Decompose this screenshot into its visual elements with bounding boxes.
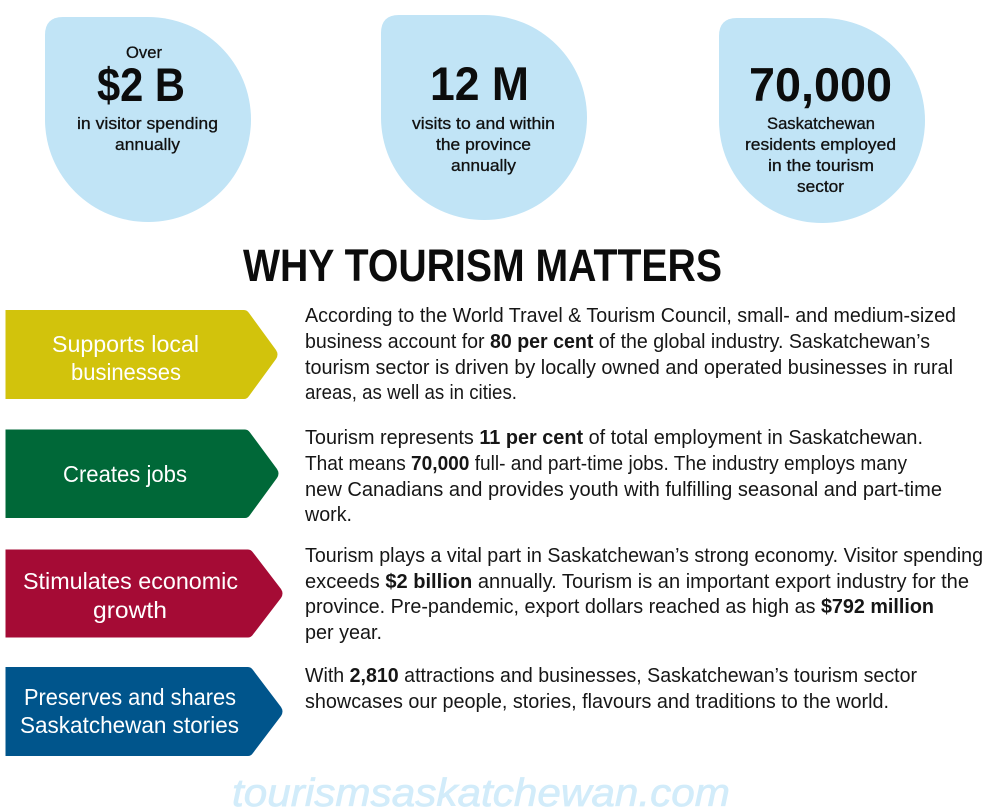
body text: [304, 426, 942, 526]
body text: [305, 304, 956, 404]
arrow label: stimulates economic growth: [6, 550, 282, 638]
body text: According to the World Travel & Tourism Council, small- and medium-sized: [305, 304, 956, 327]
body text: new Canadians and provides youth with fulfilling seasonal and part-time: [305, 478, 942, 501]
arrow label: creates jobs: Creates jobs: [63, 461, 187, 487]
stat number: $2 B: $2 B: [97, 58, 185, 111]
body text: tourism sector is driven by locally owned and operated businesses in rural: [305, 356, 953, 379]
stat number: 70,000: 70,000: [749, 58, 892, 111]
stat description: [745, 115, 896, 196]
body text: per year.: [305, 621, 382, 644]
stat description: in visitor spending: [77, 115, 218, 133]
arrow label: creates jobs: [6, 430, 278, 518]
teardrop badge: [45, 17, 251, 222]
stat label: over: Over: [126, 44, 162, 62]
panel: visitor spending stat: [45, 17, 251, 222]
arrow label: supports local businesses: Supports local: [52, 331, 199, 357]
stat description: in the tourism: [768, 157, 874, 175]
body text: With 2,810 attractions and businesses, Saskatchewan’s tourism sector: [305, 664, 917, 687]
body text: That means 70,000 full- and part-time jobs. The industry employs many: [305, 452, 908, 475]
panel: creates jobs: [6, 426, 942, 526]
body text: areas, as well as in cities.: [305, 381, 517, 404]
arrow label: supports local businesses: businesses: [71, 359, 181, 385]
stat description: the province: [436, 136, 531, 154]
arrow label: supports local businesses: [6, 310, 278, 399]
panel: employment stat: [719, 18, 925, 223]
body text: Tourism plays a vital part in Saskatchewan’s strong economy. Visitor spending: [305, 544, 983, 567]
stat description: annually: [451, 157, 517, 175]
body text: business account for 80 per cent of the global industry. Saskatchewan’s: [305, 330, 930, 353]
body text: showcases our people, stories, flavours and traditions to the world.: [305, 690, 889, 713]
teardrop badge: [381, 15, 587, 220]
body text: [305, 664, 917, 713]
title: WHY TOURISM MATTERS: [243, 240, 722, 291]
arrow label: preserves and shares Saskatchewan stories: Saskatchewan stories: [20, 712, 239, 738]
stat description: [77, 115, 218, 154]
stat number: 12 M: 12 M: [430, 57, 529, 110]
panel: supports local businesses: [6, 304, 956, 404]
arrow label: preserves and shares Saskatchewan stories: [6, 667, 282, 756]
body text: province. Pre-pandemic, export dollars reached as high as $792 million: [305, 595, 934, 618]
teardrop badge: [719, 18, 925, 223]
body text: work.: [304, 503, 352, 526]
panel: stimulates economic growth: [6, 544, 983, 644]
body text: exceeds $2 billion annually. Tourism is an important export industry for the: [305, 570, 969, 593]
stat description: visits to and within: [412, 115, 555, 133]
body text: Tourism represents 11 per cent of total employment in Saskatchewan.: [305, 426, 923, 449]
arrow label: stimulates economic growth: Stimulates economic: [23, 568, 238, 594]
stat description: annually: [115, 136, 181, 154]
arrow label: preserves and shares Saskatchewan stories: Preserves and shares: [24, 684, 236, 710]
stat description: Saskatchewan: [767, 115, 875, 133]
stat description: [412, 115, 555, 175]
stat description: residents employed: [745, 136, 896, 154]
panel: visits stat: [381, 15, 587, 220]
body text: [305, 544, 983, 644]
stat description: sector: [797, 178, 845, 196]
panel: preserves and shares stories: [6, 664, 917, 756]
arrow label: stimulates economic growth: growth: [93, 597, 167, 623]
